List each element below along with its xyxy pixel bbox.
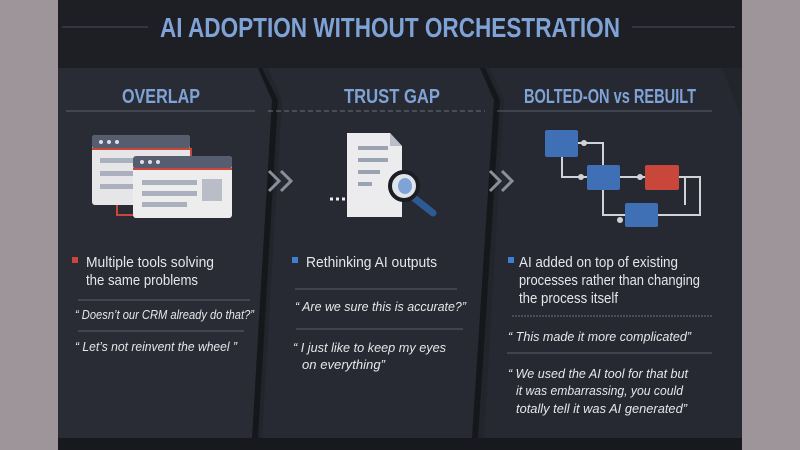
text block: bolted-on: AI added on top of existing — [519, 254, 678, 271]
text block: overlap — [72, 254, 255, 354]
text block: overlap: “ Doesn’t our CRM already do that?” — [75, 307, 255, 322]
text block: trust gap: “ I just like to keep my eyes — [293, 340, 446, 355]
arrow: chevrons 2 — [490, 171, 512, 191]
title: AI ADOPTION WITHOUT ORCHESTRATION — [160, 12, 620, 43]
text block: trust gap: on everything” — [302, 357, 386, 372]
text block: trust gap: Rethinking AI outputs — [306, 254, 437, 271]
text block: bolted-on — [507, 254, 712, 416]
panel: trust gap background — [262, 68, 500, 438]
text block: bolted-on: processes rather than changing — [519, 272, 700, 289]
text block: bolted-on: it was embarrassing, you could — [516, 383, 684, 398]
panel: bolted-on background — [484, 68, 742, 438]
heading: overlap: OVERLAP — [122, 86, 200, 108]
text block: bolted-on: “ This made it more complicated” — [508, 329, 692, 344]
panel: overlap background — [58, 68, 278, 438]
text block: overlap: “ Let’s not reinvent the wheel ” — [75, 339, 238, 354]
arrow: chevrons 1 — [269, 171, 291, 191]
icon: overlapping windows — [92, 135, 232, 218]
text block: trust gap — [292, 254, 467, 372]
heading: trust gap: TRUST GAP — [344, 86, 440, 108]
text block: trust gap: “ Are we sure this is accurate?” — [295, 299, 467, 314]
text block: bolted-on: totally tell it was AI generated” — [516, 401, 688, 416]
heading: bolted-on vs rebuilt: BOLTED-ON vs REBUILT — [524, 86, 696, 108]
text block: overlap: Multiple tools solving — [86, 254, 214, 271]
icon: process flowchart — [545, 130, 700, 227]
text block: overlap: the same problems — [86, 272, 198, 289]
text block: bolted-on: “ We used the AI tool for that but — [508, 366, 689, 381]
icon: document with magnifier — [330, 133, 433, 217]
text block: bolted-on: the process itself — [519, 290, 619, 307]
